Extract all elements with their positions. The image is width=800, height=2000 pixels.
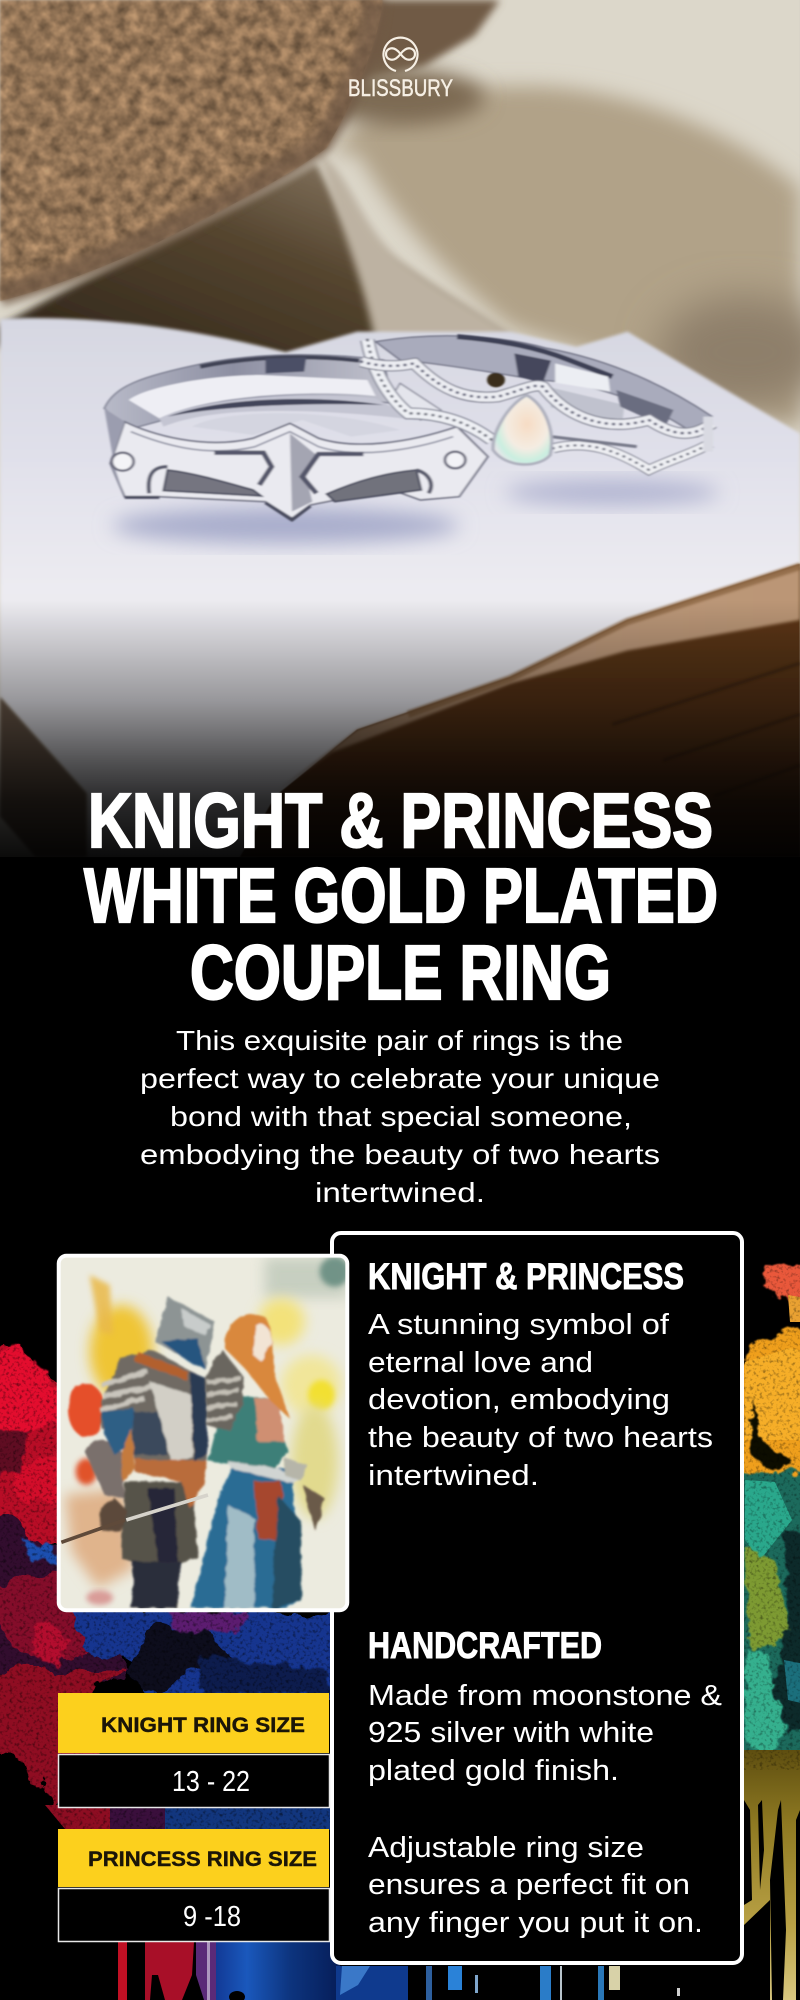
text block: symbol description: A stunning symbol of xyxy=(368,1309,670,1341)
text block: adjustable size: ensures a perfect fit on xyxy=(368,1869,690,1901)
text block: symbol description: devotion, embodying xyxy=(368,1384,670,1416)
text block: symbol description: eternal love and xyxy=(368,1347,593,1379)
hero photo of rings xyxy=(0,0,800,858)
panel: product details xyxy=(332,1233,742,1963)
princess figure xyxy=(191,1314,325,1608)
icon: infinity circle xyxy=(384,38,418,71)
logo: Blissbury xyxy=(348,38,453,102)
text block: adjustable size xyxy=(368,1832,703,1939)
table: knight ring size: KNIGHT RING SIZE xyxy=(101,1714,305,1737)
heading: handcrafted: HANDCRAFTED xyxy=(368,1625,602,1666)
text block: materials xyxy=(368,1680,722,1787)
intro description: intertwined. xyxy=(315,1177,485,1208)
heading: knight and princess: KNIGHT & PRINCESS xyxy=(368,1256,684,1297)
princess ring xyxy=(361,336,712,470)
table: princess ring size: 9 -18 xyxy=(183,1901,241,1933)
text block: materials: Made from moonstone & xyxy=(368,1680,722,1712)
intro description: This exquisite pair of rings is the xyxy=(176,1025,623,1056)
bottom fade of photo xyxy=(0,600,800,858)
table: knight ring size: 13 - 22 xyxy=(172,1766,250,1798)
title: COUPLE RING xyxy=(190,930,611,1016)
paint splash: left xyxy=(0,1340,340,2000)
text block: materials: 925 silver with white xyxy=(368,1717,654,1749)
rings xyxy=(104,336,712,520)
intro description xyxy=(140,1025,660,1208)
text block: adjustable size: Adjustable ring size xyxy=(368,1832,644,1864)
sword xyxy=(61,1495,208,1542)
table: princess ring size: PRINCESS RING SIZE xyxy=(88,1848,317,1871)
illustration: knight and princess watercolor xyxy=(58,1255,350,1611)
paint splash: right xyxy=(740,1250,800,2000)
intro description: perfect way to celebrate your unique xyxy=(140,1063,660,1094)
text block: symbol description: intertwined. xyxy=(368,1460,539,1492)
text block: materials: plated gold finish. xyxy=(368,1755,619,1787)
text block: symbol description xyxy=(368,1309,713,1492)
text block: adjustable size: any finger you put it on. xyxy=(368,1907,703,1939)
table: knight ring size xyxy=(58,1693,330,1808)
knight ring xyxy=(104,355,488,520)
title xyxy=(84,778,718,1016)
knight figure xyxy=(85,1297,215,1608)
intro description: bond with that special someone, xyxy=(170,1101,632,1132)
intro description: embodying the beauty of two hearts xyxy=(140,1139,660,1170)
paint streaks: below panel xyxy=(336,1966,680,2000)
text block: symbol description: the beauty of two hearts xyxy=(368,1422,713,1454)
moonstone gem xyxy=(493,395,552,464)
table: princess ring size xyxy=(58,1829,330,1942)
logo: Blissbury: BLISSBURY xyxy=(348,75,453,102)
